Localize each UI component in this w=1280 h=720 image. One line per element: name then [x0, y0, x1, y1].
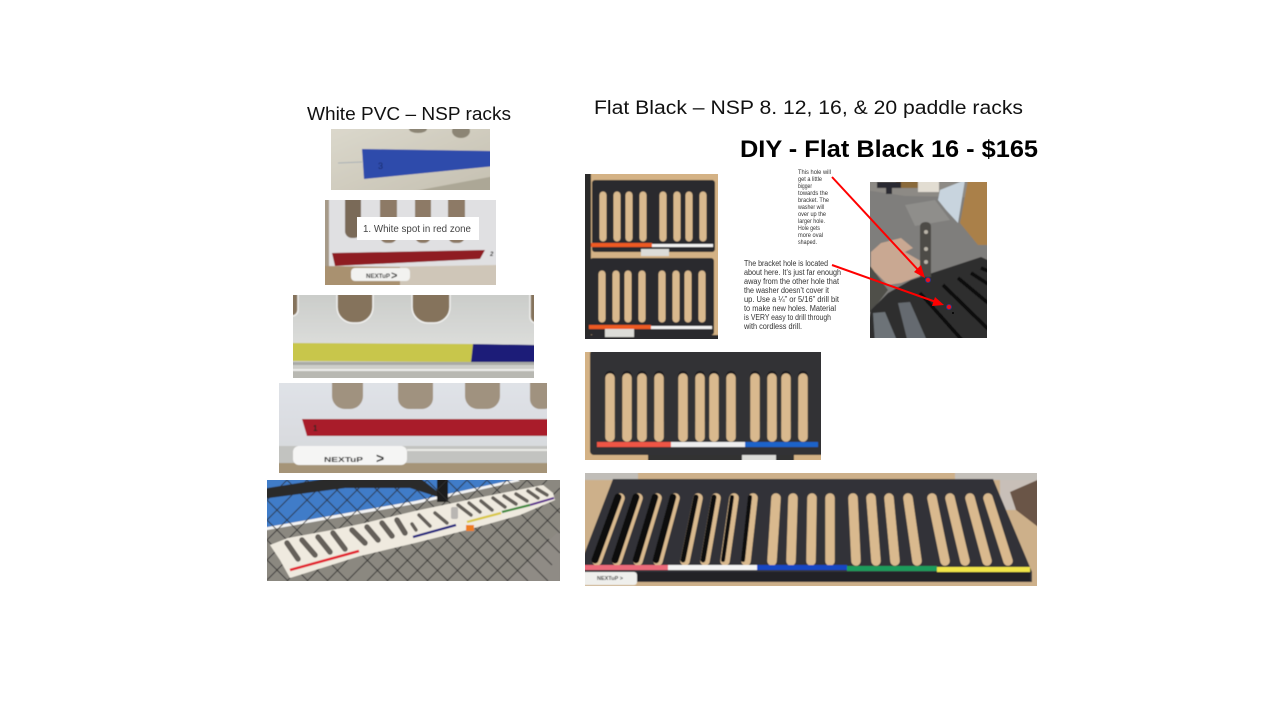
- photo: red zone with NEXTuP tube: >: [376, 450, 384, 466]
- photo: two Flat Black 8 racks: [585, 174, 718, 339]
- text: hole gets bigger: get a little: [798, 176, 822, 183]
- text: hole gets bigger: [797, 169, 831, 246]
- slide: paddle rack comparison: [267, 100, 1038, 586]
- photo: white spot in red zone: NEXTuP: [366, 273, 391, 280]
- photo: white spot in red zone: 2: [489, 252, 494, 258]
- text: bracket hole location: with cordless drill.: [743, 322, 802, 331]
- text: hole gets bigger: shaped.: [798, 239, 817, 246]
- photo: white spot in red zone: >: [391, 270, 397, 282]
- heading: DIY price: DIY - Flat Black 16 - $165: [740, 136, 1038, 163]
- arrow: to upper hole: [832, 177, 931, 283]
- arrow: to bracket hole: [832, 265, 954, 314]
- text: hole gets bigger: larger hole.: [798, 218, 825, 225]
- photo: white rack mounted on fence: [267, 480, 560, 581]
- text: bracket hole location: the washer doesn’t cover it: [744, 286, 830, 295]
- photo: Flat Black 12 rack: [585, 352, 821, 460]
- heading: White PVC: White PVC – NSP racks: [307, 103, 511, 124]
- text: hole gets bigger: more oval: [798, 232, 823, 239]
- photo: red zone with NEXTuP tube: [279, 383, 547, 473]
- photo: bracket held over rack: [870, 182, 987, 338]
- text: hole gets bigger: This hole will: [798, 169, 831, 176]
- text: hole gets bigger: bracket. The: [798, 197, 829, 204]
- text: hole gets bigger: Hole gets: [798, 225, 821, 232]
- text: hole gets bigger: bigger: [798, 183, 813, 190]
- photo: white spot in red zone: [325, 200, 496, 285]
- text: hole gets bigger: over up the: [798, 211, 826, 218]
- photo: Flat Black 20 rack: [585, 473, 1037, 586]
- photo: Flat Black 20 rack: NEXTuP >: [597, 576, 623, 582]
- photo: red zone with NEXTuP tube: NEXTuP: [324, 455, 363, 464]
- text: bracket hole location: is VERY easy to drill through: [744, 313, 831, 322]
- heading: Flat Black: Flat Black – NSP 8. 12, 16, & 20 paddle racks: [594, 97, 1023, 119]
- photo: blue zone on white rack: [331, 129, 490, 190]
- callout: white spot label: [357, 217, 479, 240]
- text: hole gets bigger: towards the: [798, 190, 828, 197]
- text: hole gets bigger: washer will: [797, 204, 824, 211]
- photo: red zone with NEXTuP tube: 1: [313, 424, 318, 433]
- text: bracket hole location: The bracket hole is located: [744, 259, 828, 268]
- text: bracket hole location: to make new holes. Material: [744, 304, 836, 313]
- callout: white spot label: 1. White spot in red zone: [363, 223, 471, 235]
- text: bracket hole location: about here. It’s just far enough: [744, 268, 841, 277]
- text: bracket hole location: [743, 259, 841, 331]
- text: bracket hole location: away from the other hole that: [744, 277, 840, 286]
- photo: blue zone on white rack: 3: [378, 161, 383, 171]
- photo: yellow and navy zones: [293, 295, 534, 378]
- text: bracket hole location: up. Use a ¼” or 5/16” drill bit: [744, 295, 840, 304]
